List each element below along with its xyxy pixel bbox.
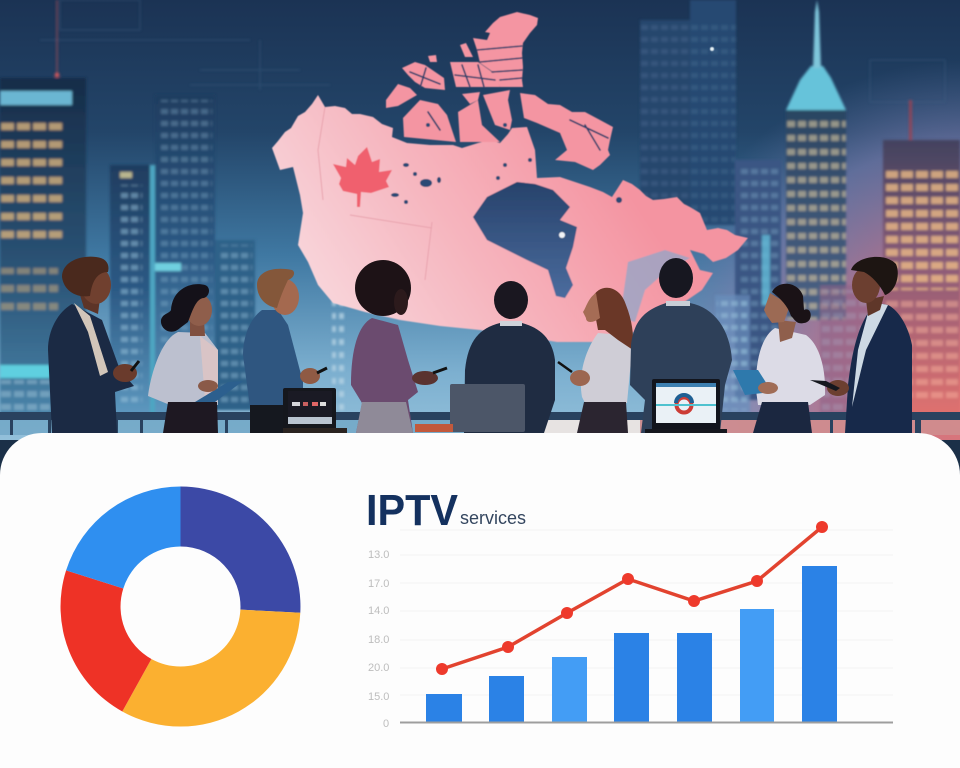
combo chart <box>368 521 893 730</box>
faint HUD lines <box>40 0 945 102</box>
map: lakes and specks <box>391 123 622 204</box>
y axis labels: 0 <box>383 718 389 730</box>
segment: red <box>61 570 151 712</box>
person 5: man from behind in dark suit <box>464 281 555 433</box>
icon: maple leaf <box>333 147 392 207</box>
y axis labels: 20.0 <box>368 662 389 674</box>
map of Canada <box>272 12 748 342</box>
person 8: woman with bun and tablet <box>733 284 825 433</box>
map: Hudson Bay <box>473 182 577 298</box>
segment: light blue <box>66 486 180 588</box>
trend line <box>436 521 828 675</box>
y axis labels: 18.0 <box>368 634 389 646</box>
title: services <box>460 508 526 528</box>
person 7: man from behind in slate suit <box>630 258 732 433</box>
laptop right with ring chart <box>645 379 727 433</box>
city skyline background <box>0 0 960 440</box>
building: blue tower centre right <box>640 0 736 225</box>
white bottom panel <box>0 433 960 768</box>
person 9: man in dark blue suit <box>810 257 912 433</box>
building: far left tower <box>0 78 86 418</box>
person 6: woman with long hair <box>558 288 633 433</box>
y axis labels: 15.0 <box>368 691 389 703</box>
segment: dark blue <box>180 486 300 613</box>
map: mainland <box>272 95 748 342</box>
map: thin channels <box>410 46 608 150</box>
y axis labels: 13.0 <box>368 549 389 561</box>
building: spire tower <box>735 0 846 400</box>
laptop left <box>283 388 347 433</box>
map: Gulf of St Lawrence <box>620 250 690 322</box>
y axis labels: 17.0 <box>368 578 389 590</box>
person 1: man in navy suit <box>48 257 139 433</box>
balcony railing <box>0 412 960 435</box>
group of nine people <box>48 257 912 433</box>
map: Arctic islands <box>386 12 613 170</box>
building: right orange tower <box>820 100 960 415</box>
bars <box>426 566 837 722</box>
donut chart <box>61 486 300 727</box>
y axis labels: 14.0 <box>368 605 389 617</box>
building: left cyan-edged tower <box>110 95 255 415</box>
y axis labels <box>368 549 389 730</box>
open laptop back <box>415 384 525 432</box>
person 2: woman with white blouse and tablet <box>148 284 243 433</box>
building: blue lit mid tower behind group <box>332 295 750 415</box>
title <box>366 486 526 535</box>
person 3: man in blue shirt <box>243 269 327 433</box>
person 4: woman with afro in mauve blouse <box>351 260 447 433</box>
title: IPTV <box>366 486 459 535</box>
segment: yellow <box>122 610 300 727</box>
